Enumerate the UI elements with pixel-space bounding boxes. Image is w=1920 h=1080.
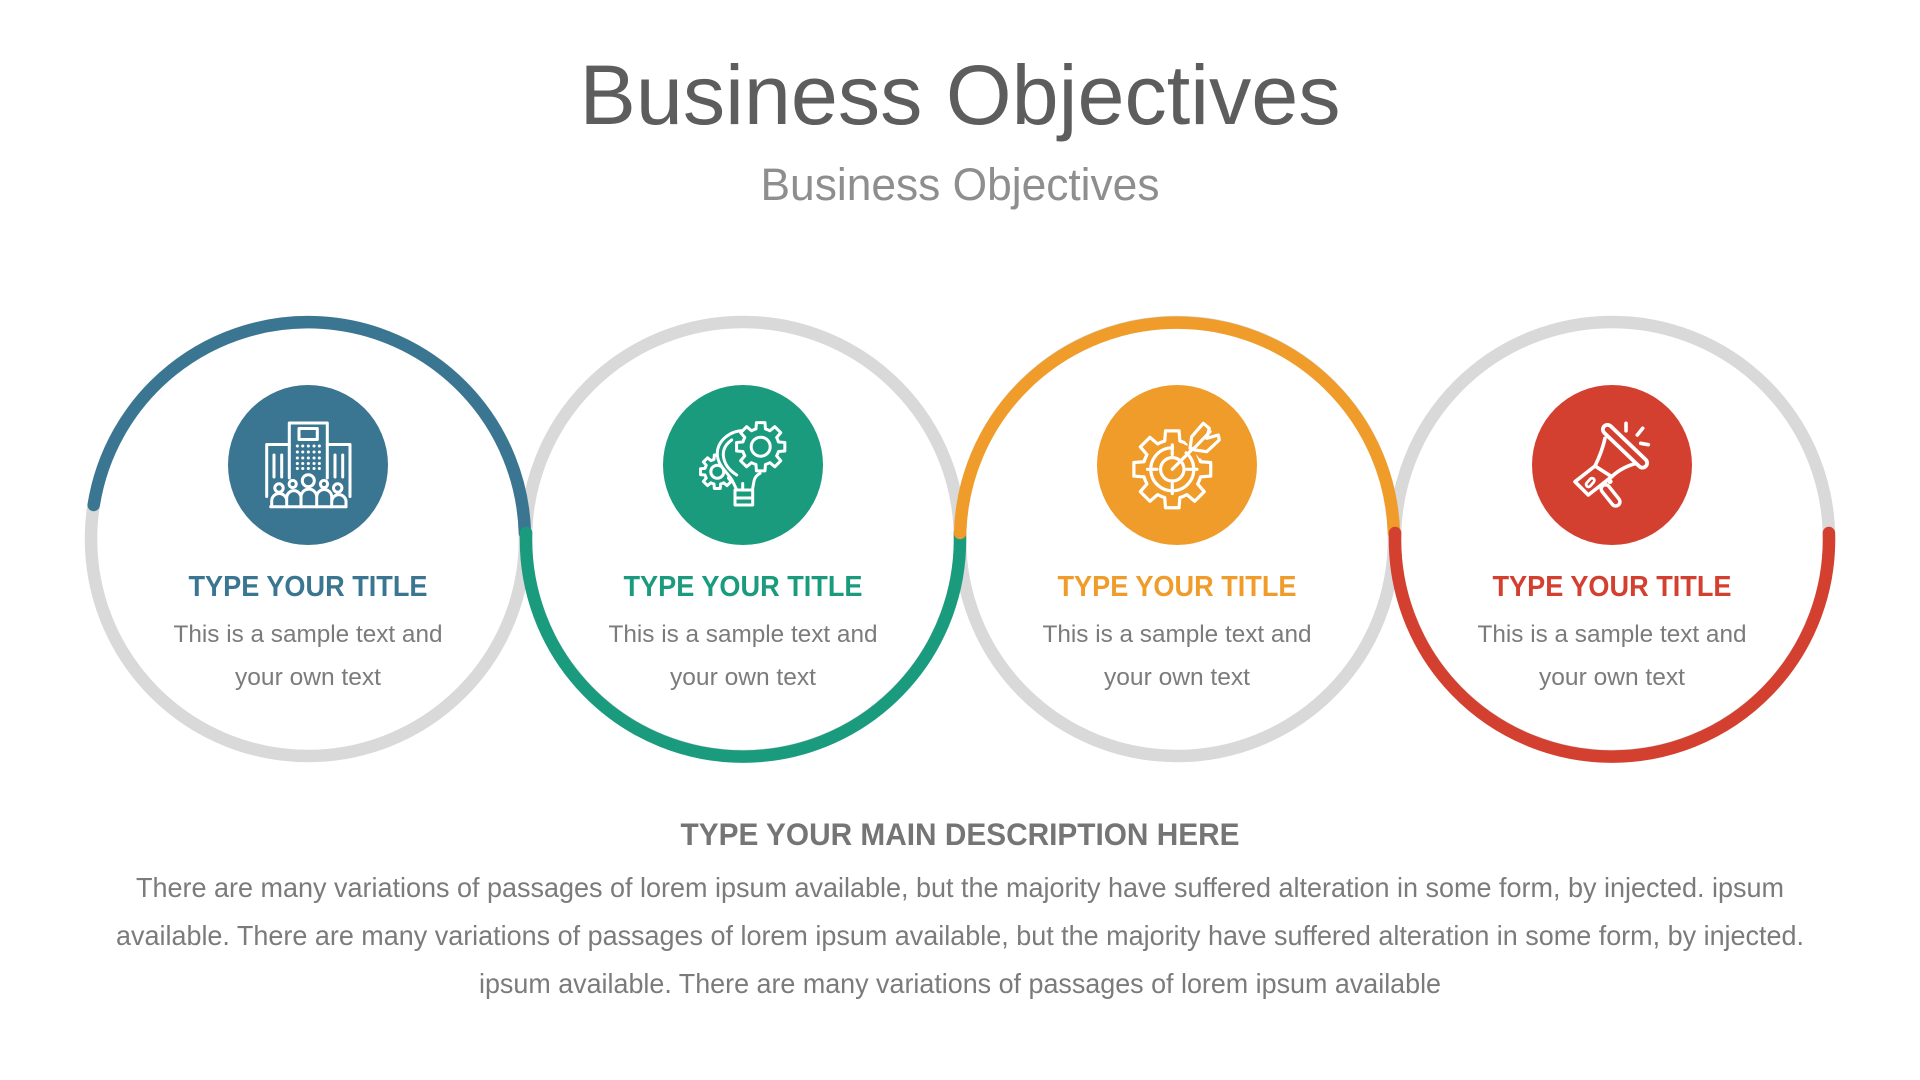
main description text: ipsum available. There are many variations of passages of lorem ipsum available [479, 968, 1441, 999]
main description heading: TYPE YOUR MAIN DESCRIPTION HERE [680, 816, 1240, 852]
main description text: There are many variations of passages of lorem ipsum available, but the majority have suffered alteration in some form, by injected. ipsum [136, 872, 1784, 903]
card text: your own text [670, 664, 816, 691]
subtitle: Business Objectives [760, 159, 1160, 210]
card text: your own text [1104, 664, 1250, 691]
arc: blue progress [94, 322, 525, 533]
card text: This is a sample text and [608, 621, 878, 648]
card title: TYPE YOUR TITLE [1492, 571, 1732, 603]
card text [1042, 621, 1312, 691]
icon: office building with people [267, 423, 350, 507]
panel: card 1 blue [94, 322, 525, 691]
card title: TYPE YOUR TITLE [188, 571, 428, 603]
title: Business Objectives [580, 48, 1340, 142]
icon: light bulb with gears [701, 423, 785, 505]
card text: your own text [1539, 664, 1685, 691]
card title: TYPE YOUR TITLE [624, 571, 862, 603]
panel: card 2 green [526, 385, 960, 757]
arc: orange progress [960, 323, 1394, 533]
arc: green progress [526, 533, 960, 757]
icon: megaphone [1575, 423, 1648, 502]
card text: This is a sample text and [1042, 621, 1312, 648]
card text [1478, 621, 1746, 691]
grey circle tracks [91, 322, 1829, 756]
arc: red progress [1395, 533, 1829, 757]
card text [174, 621, 442, 691]
icon disc: green [663, 385, 823, 545]
card text: your own text [235, 664, 381, 691]
panel: card 3 orange [960, 323, 1394, 691]
icon: gear target with arrow [1134, 423, 1219, 508]
icon disc: blue [228, 385, 388, 545]
icon disc: orange [1097, 385, 1257, 545]
card title: TYPE YOUR TITLE [1058, 571, 1296, 603]
card text: This is a sample text and [174, 621, 442, 648]
panel: card 4 red [1395, 385, 1829, 757]
card text [608, 621, 878, 691]
icon disc: red [1532, 385, 1692, 545]
main description text [116, 872, 1804, 999]
card text: This is a sample text and [1478, 621, 1746, 648]
main description text: available. There are many variations of passages of lorem ipsum available, but the majority have suffered alteration in some form, by injected. [116, 920, 1804, 951]
